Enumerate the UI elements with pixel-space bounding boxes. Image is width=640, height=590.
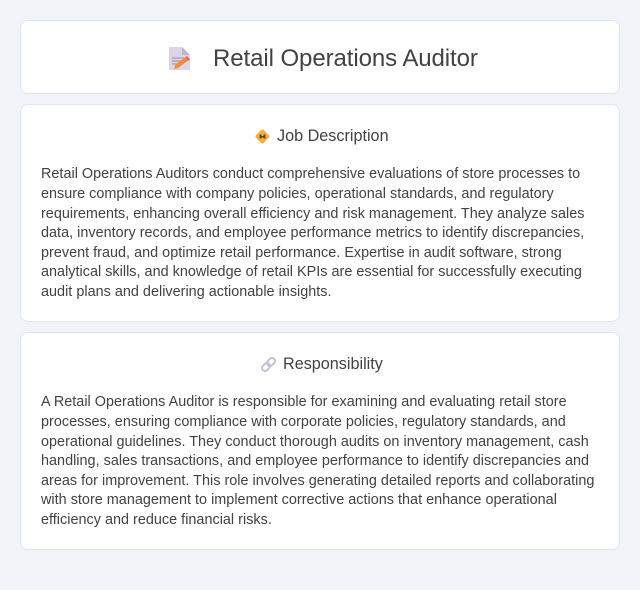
- text block: responsibility: [41, 394, 594, 528]
- icon: diamond sign: [256, 129, 270, 144]
- text block: job description: prevent fraud, and optimize retail performance. Expertise in audit software, strong: [41, 245, 562, 261]
- title: Retail Operations Auditor: [213, 45, 478, 72]
- text block: job description: audit plans and delivering actionable insights.: [41, 284, 332, 300]
- heading: responsibility: Responsibility: [283, 355, 383, 373]
- panel: job description: [20, 104, 620, 322]
- text block: job description: Retail Operations Auditors conduct comprehensive evaluations of store processes to: [41, 166, 580, 182]
- icon: chain link: [261, 357, 276, 372]
- text block: job description: ensure compliance with company policies, operational standards, and regulatory: [41, 186, 554, 202]
- text block: job description: data, inventory records, and employee performance metrics to identify discrepancies,: [41, 225, 584, 241]
- text block: responsibility: areas for improvement. This role involves generating detailed reports and collaborating: [41, 473, 594, 489]
- icon: document with pencil: [169, 47, 190, 70]
- text block: job description: analytical skills, and knowledge of retail KPIs are essential for successfully executing: [41, 264, 582, 280]
- text block: responsibility: handling, sales transactions, and employee performance to identify discrepancies and: [41, 453, 589, 469]
- text block: job description: requirements, enhancing overall efficiency and risk management. They analyze sales: [41, 206, 584, 222]
- heading: job description: Job Description: [277, 127, 389, 145]
- panel: title card: [20, 20, 620, 94]
- text block: responsibility: operational guidelines. They conduct thorough audits on inventory management, cash: [41, 434, 589, 450]
- text block: responsibility: with store management to implement corrective actions that enhance operational: [41, 492, 557, 508]
- text block: responsibility: A Retail Operations Auditor is responsible for examining and evaluating retail store: [41, 394, 567, 410]
- text block: responsibility: processes, ensuring compliance with corporate policies, regulatory standards, and: [41, 414, 566, 430]
- text block: responsibility: efficiency and reduce financial risks.: [41, 512, 272, 528]
- panel: responsibility: [20, 332, 620, 550]
- text block: job description: [41, 166, 584, 300]
